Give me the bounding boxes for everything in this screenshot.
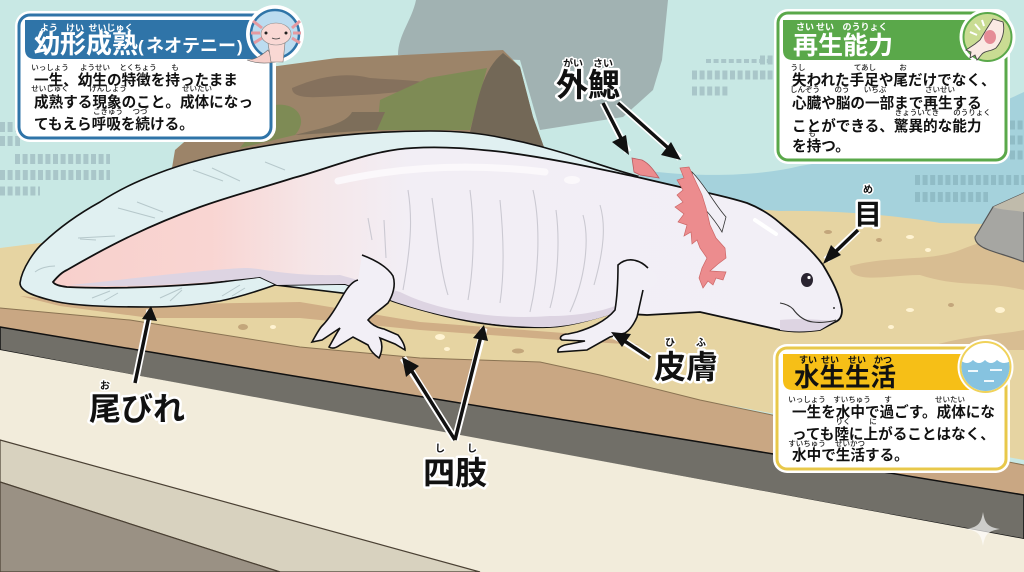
label: tail fin: お <box>100 380 110 392</box>
tail fin <box>20 131 637 307</box>
label: eye: 目 <box>854 199 882 230</box>
panel body text: のう <box>834 85 850 94</box>
panel body text: きょういてき <box>895 108 939 117</box>
panel body text: せいかつ <box>835 439 865 448</box>
background: aquarium wall and water <box>0 0 1024 300</box>
panel heading: ( <box>138 37 144 56</box>
label: tail fin: 尾びれ <box>89 391 185 427</box>
panel body text: っても陸に上がることはなく、 <box>792 425 995 443</box>
sparkle watermark <box>966 512 1000 546</box>
panel body text: てもえら呼吸を続ける。 <box>34 116 194 133</box>
panel icon: mini axolotl <box>246 5 304 63</box>
panel body text: 失われた手足や尾だけでなく、 <box>792 71 996 89</box>
panel body text <box>31 63 253 133</box>
label: limbs: し <box>467 443 477 455</box>
arrow: eye <box>823 230 858 264</box>
label: limbs: 四肢 <box>423 455 487 491</box>
panel body text: 一生を水中で過ごす。成体にな <box>792 403 995 421</box>
panel body text: せいたい <box>935 395 965 404</box>
panel: aquatic life <box>773 339 1014 473</box>
panel body text: げんしょう <box>89 83 127 93</box>
panel heading: せいじゅく <box>88 23 134 33</box>
panel heading: 水生生活 <box>794 364 896 392</box>
label: eye: め <box>863 184 873 196</box>
label: skin: ふ <box>696 337 706 349</box>
panel body text: 心臓や脳の一部まで再生する <box>792 94 982 112</box>
label: external gills: がい <box>563 57 583 70</box>
panel body text: せいたい <box>182 84 212 93</box>
panel body text: も <box>171 63 179 72</box>
panel heading: けい <box>66 23 84 33</box>
panel body text <box>790 63 996 155</box>
panel body text: いっしょう <box>31 63 69 72</box>
panel body text: すいちゅう <box>833 395 871 404</box>
panel body text: お <box>899 63 907 72</box>
external gills <box>632 158 726 288</box>
panel body text: のうりょく <box>953 108 991 117</box>
panel heading <box>34 23 243 59</box>
label: external gills: 外鰓 <box>556 67 620 103</box>
panel body text: すいちゅう <box>788 439 826 448</box>
panel body text <box>788 395 995 464</box>
panel heading: よう <box>40 23 58 33</box>
front leg <box>558 260 657 352</box>
panel body text: こきゅう <box>93 107 123 116</box>
panel heading: かつ <box>874 355 892 365</box>
panel body text: うし <box>790 63 806 72</box>
panel body text: いっしょう <box>788 395 826 404</box>
panel heading: さい <box>796 22 814 32</box>
panel heading: せい <box>848 355 866 365</box>
panel heading: 幼形成熟 <box>34 29 138 59</box>
panel body text: 成熟する現象のこと。成体になっ <box>34 93 253 111</box>
eye <box>801 273 813 287</box>
panel body text: せいじゅく <box>31 84 69 93</box>
panel body text: ようせい <box>80 63 110 72</box>
panel: neoteny <box>15 5 304 142</box>
panel icon: water <box>958 339 1014 395</box>
arrows: limbs <box>402 325 488 440</box>
background: sand and substrate <box>0 205 1024 572</box>
arrows: external gills <box>603 103 681 160</box>
panel body text: す <box>884 395 892 404</box>
panel heading: 再生能力 <box>793 32 893 60</box>
panel body text: しんぞう <box>790 85 820 94</box>
label: limbs: し <box>435 443 445 455</box>
arrow: tail fin <box>135 306 157 383</box>
panel icon: regrown hand <box>960 9 1016 65</box>
label: skin: 皮膚 <box>654 349 718 385</box>
panel heading: ) <box>237 37 243 56</box>
panel body text: に <box>869 417 877 426</box>
panel body text: を持つ。 <box>792 138 850 155</box>
panel body text: いちぶ <box>864 85 887 94</box>
arrow: skin <box>611 332 650 358</box>
panel: regeneration <box>774 9 1016 164</box>
label: skin: ひ <box>665 338 675 349</box>
label: eye <box>854 184 882 230</box>
panel body text: 水中で生活する。 <box>792 447 909 464</box>
panel heading: のうりょく <box>842 22 888 32</box>
background: mossy brown rock <box>172 50 545 168</box>
panel heading: すい <box>799 355 817 365</box>
panel body text: 一生、幼生の特徴を持ったまま <box>34 71 238 89</box>
panel body text: も <box>808 129 816 138</box>
panel body text: てあし <box>854 63 876 72</box>
panel body text: とくちょう <box>119 63 157 72</box>
background: small rock at right <box>975 193 1024 262</box>
panel heading: せい <box>821 355 839 365</box>
axolotl body <box>53 147 842 332</box>
panel heading: せい <box>816 22 834 32</box>
panel heading: ネオテニー <box>146 36 236 56</box>
panel body text: つづ <box>132 106 148 116</box>
panel body text: ことができる、驚異的な能力 <box>792 117 981 135</box>
panel body text: りく <box>836 417 850 426</box>
label: external gills: さい <box>593 58 613 70</box>
background: grey rock <box>398 0 668 130</box>
rear leg <box>312 255 405 358</box>
panel body text: さいせい <box>925 85 955 94</box>
